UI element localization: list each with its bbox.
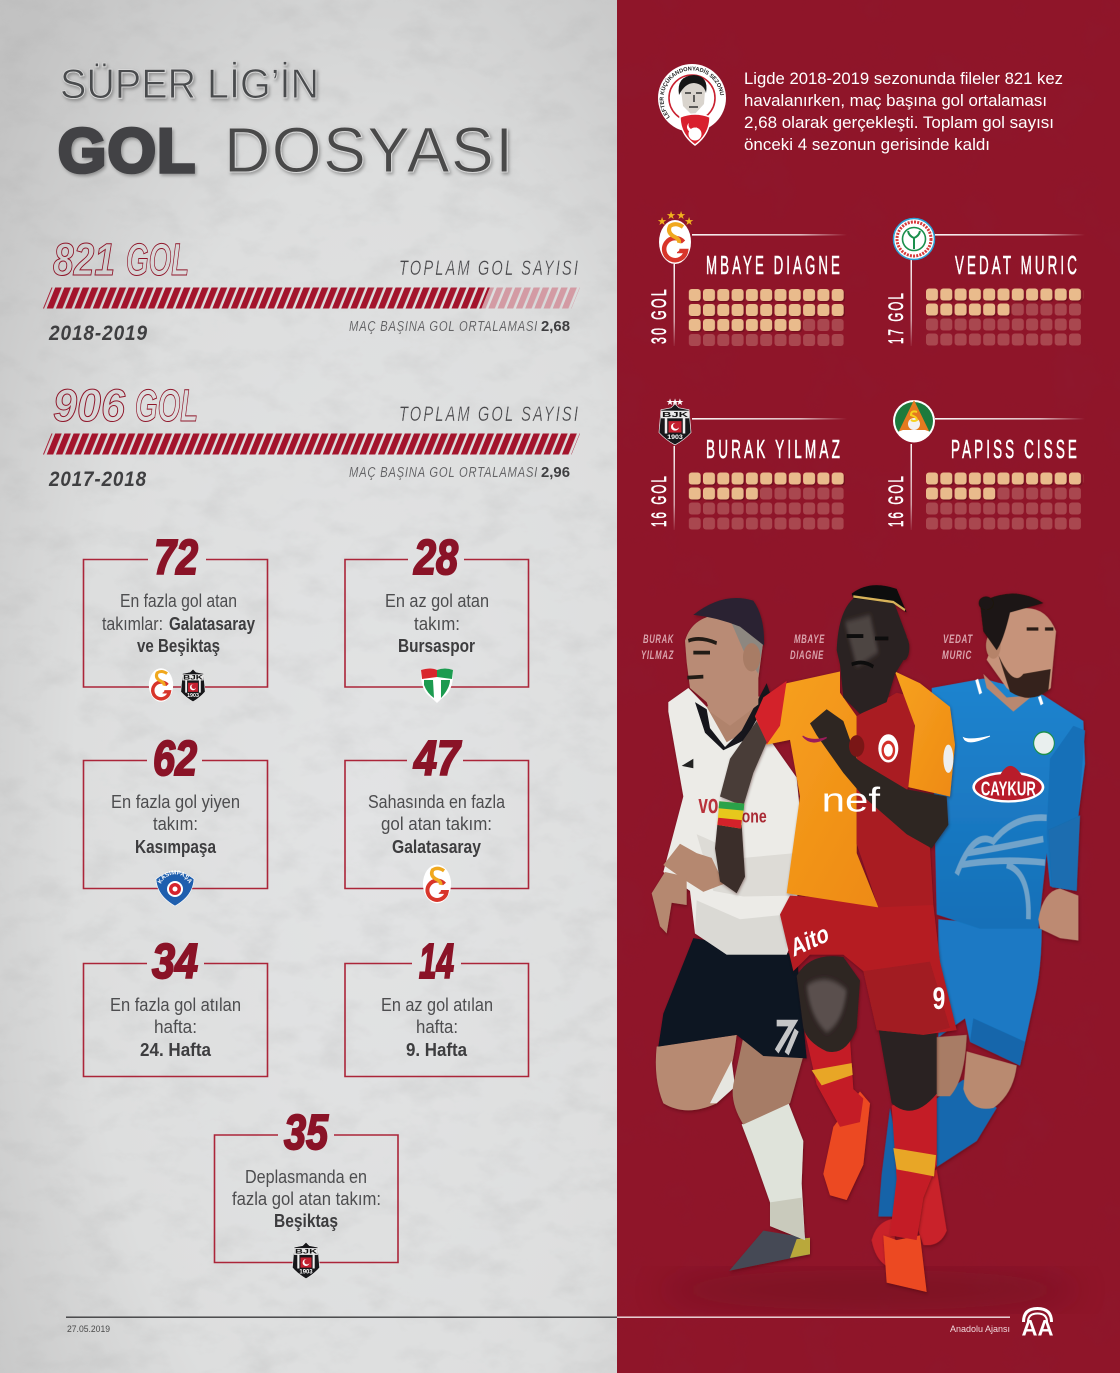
heading: 821 GOL: GOL [126,234,189,285]
icon: Galatasaray crest with stars: ★ [676,210,686,222]
striped bar 2017-2018 [43,434,580,454]
stat box: 72 [84,531,268,702]
icon: Galatasaray crest with stars [657,210,694,264]
icon: Galatasaray crest with stars: ★ [657,216,667,228]
stat box: 28: Bursaspor [398,636,475,656]
stat box: 72: 72 [154,531,198,585]
player label: Mbaye Diagne [790,632,825,662]
heading: 821 GOL [53,234,189,285]
player label: Burak Yılmaz [641,632,674,662]
icon: Beşiktaş crest [181,669,205,702]
icon: Alanyaspor crest [893,400,935,443]
illustration: Mbaye Diagne in Galatasaray kit [715,585,957,1292]
stat box: 35: Beşiktaş [274,1211,338,1231]
stat box: 47: Galatasaray [392,837,481,857]
stat box: 34 [84,935,268,1076]
icon: Kasımpaşa crest: KASIMPAŞA [158,870,192,884]
player label: Mbaye Diagne: MBAYE [794,632,825,646]
icon: Galatasaray crest with stars: ★ [666,210,676,222]
average per match: MAÇ BAŞINA GOL ORTALAMASI [349,464,538,481]
stat box: 62: En fazla gol yiyen [111,792,240,812]
date: 27.05.2019 [67,1324,110,1335]
stat box: 47: 47 [413,732,462,786]
illustration: Burak Yılmaz in white kit [652,598,810,1271]
illustration: Vedat Muric in blue kit [872,594,1085,1266]
heading: 906 GOL: GOL [135,380,198,431]
panel: Papiss Cisse 16 goals [885,400,1085,532]
stat box: 35 [214,1106,398,1279]
stat box: 35: Deplasmanda en [245,1167,367,1187]
stat box: 28: En az gol atan [385,591,489,611]
stat box: 28 [345,531,528,703]
illustration: Burak Yılmaz in white kit: vo [698,789,718,819]
label: total goals: TOPLAM GOL SAYISI [399,403,580,426]
stat box: 14: En az gol atılan [381,995,493,1015]
ground shadow [660,1270,1080,1310]
player label: Vedat Muric: MURIC [942,648,972,662]
panel: 2017-2018 total goals [43,380,580,491]
icon: Beşiktaş crest with stars: ★★★ [666,397,684,407]
stat box: 47: Sahasında en fazla [368,792,506,812]
striped bar 2018-2019 [43,288,580,308]
footer [66,1308,1054,1340]
icon: Galatasaray crest [423,865,451,903]
icon: Galatasaray crest [149,668,173,702]
goal grid [689,289,846,349]
title: DOSYASI [224,114,513,186]
stat box: 62: 62 [153,732,197,786]
illustration: Mbaye Diagne in Galatasaray kit: Aito [788,918,831,962]
goal count: 16 GOL [648,474,671,527]
icon: Beşiktaş crest with stars [659,397,691,445]
season label: 2017-2018 [48,468,147,491]
title [58,60,513,186]
panel: Vedat Muric 17 goals [885,218,1085,348]
title: SÜPER LİG’İN [60,60,319,107]
goal count: 17 GOL [885,291,908,344]
stat box: 47 [345,732,528,903]
goal count: 30 GOL [648,287,671,344]
player label: Mbaye Diagne: DIAGNE [790,648,824,662]
credit: Anadolu Ajansı [950,1324,1010,1335]
icon: Rizespor crest [893,218,935,260]
icon: Bursaspor crest [421,668,453,703]
intro text [744,69,1063,154]
heading: 906 GOL [53,380,198,431]
icon: Lefter Küçükandonyadis season badge [658,64,726,146]
intro text: Ligde 2018-2019 sezonunda fileler 821 kez [744,69,1063,88]
illustration: Mbaye Diagne in Galatasaray kit: 9 [933,981,945,1016]
icon: Lefter Küçükandonyadis season badge: LEFTER KÜÇÜKANDONYADİS SEZONU [660,66,724,120]
player label: Vedat Muric [942,632,973,662]
label: total goals: TOPLAM GOL SAYISI [399,257,580,280]
icon: Kasımpaşa crest [156,870,194,906]
icon: Galatasaray crest with stars: ★ [684,216,694,228]
goal grid [926,472,1083,532]
illustration: Vedat Muric in blue kit: CAYKUR [981,777,1036,800]
panel: left background [0,0,617,1373]
player label: Burak Yılmaz: BURAK [643,632,674,646]
stat box: 72: ve Beşiktaş [137,636,220,656]
stat box: 62: takım: [153,814,198,834]
stat box: 34: 34 [152,935,198,989]
average per match: 2,96 [541,465,570,481]
season label: 2018-2019 [48,322,148,345]
stat box: 34: 24. Hafta [140,1040,212,1060]
illustration: Burak Yılmaz in white kit: one [742,806,767,827]
stat box: 28: takım: [414,614,460,634]
stat box: 35: fazla gol atan takım: [232,1189,381,1209]
stat box: 47: gol atan takım: [381,814,492,834]
stat box: 34: hafta: [154,1017,197,1037]
panel: right background [617,0,1120,1373]
intro text: havalanırken, maç başına gol ortalaması [744,91,1047,110]
stat box: 14: 9. Hafta [406,1040,468,1060]
panel: Burak Yılmaz 16 goals [648,397,847,532]
player label: Vedat Muric: VEDAT [943,632,973,646]
heading: 821 GOL: 821 [53,234,115,285]
player name: MBAYE DIAGNE [706,250,843,280]
player label: Burak Yılmaz: YILMAZ [641,648,674,662]
goal count: 16 GOL [885,474,908,527]
intro text: 2,68 olarak gerçekleşti. Toplam gol sayısı [744,113,1054,132]
icon: Anadolu Agency logo: AA [1022,1316,1054,1340]
intro text: önceki 4 sezonun gerisinde kaldı [744,135,990,154]
illustration: Mbaye Diagne in Galatasaray kit: nef [822,782,881,820]
stat box: 28: 28 [413,531,459,585]
average per match: 2,68 [541,319,570,335]
stat box: 14: hafta: [416,1017,458,1037]
stat box: 72: En fazla gol atan [120,591,237,611]
title: GOL [58,117,195,186]
goal grid [926,288,1083,348]
stat box: 34: En fazla gol atılan [110,995,241,1015]
icon: Beşiktaş crest [292,1242,320,1279]
stat box: 14 [345,935,528,1076]
stat box: 62 [82,732,268,906]
stat box: 14: 14 [419,935,454,989]
panel: 2018-2019 total goals [43,234,580,345]
stat box: 35: 35 [284,1106,329,1160]
heading: 906 GOL: 906 [53,380,126,431]
stat box: 72: Galatasaray [169,614,255,634]
player name: BURAK YILMAZ [706,434,843,464]
panel: Mbaye Diagne 30 goals [648,210,847,349]
stat box: 62: Kasımpaşa [135,837,217,857]
goal grid [689,472,846,532]
stat box: 72: takımlar: [102,614,163,634]
average per match: MAÇ BAŞINA GOL ORTALAMASI [349,318,538,335]
